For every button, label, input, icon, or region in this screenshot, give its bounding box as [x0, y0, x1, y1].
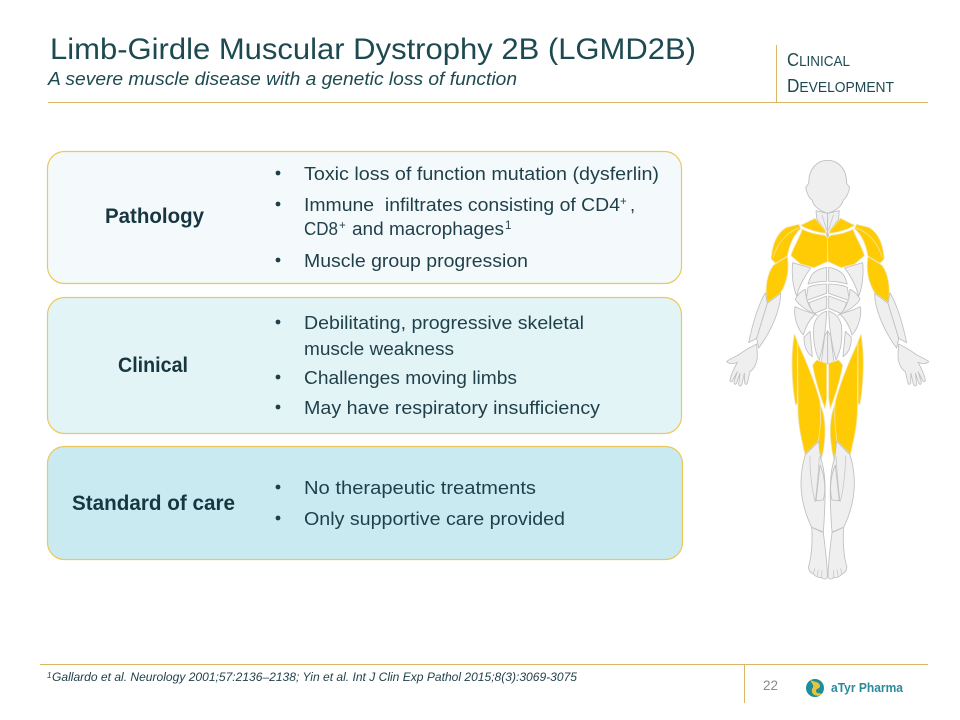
logo: aTyr Pharma	[806, 679, 904, 697]
legs and hands	[727, 334, 929, 579]
section label: clinical development: CLINICAL	[787, 50, 850, 70]
bullet list: clinical	[276, 312, 601, 418]
bullet list: pathology: and macrophages	[352, 218, 504, 239]
bullet list: pathology: Immune infiltrates consisting of CD4	[304, 194, 620, 215]
bullet list: clinical: Debilitating, progressive skeletal	[304, 312, 584, 333]
heading: clinical: Clinical	[118, 354, 188, 377]
bullet list: pathology: CD8	[304, 218, 338, 239]
heading: standard of care: Standard of care	[72, 492, 235, 515]
bullet list: pathology: ,	[630, 194, 635, 215]
section label: clinical development: DEVELOPMENT	[787, 76, 894, 96]
bullet list: pathology: +	[339, 220, 346, 232]
section label: clinical development	[787, 50, 894, 96]
bullet list: pathology: Toxic loss of function mutation (dysferlin)	[304, 163, 659, 184]
bullet list: pathology	[276, 163, 659, 271]
bullet list: standard of care	[276, 477, 565, 529]
torso and arms	[749, 160, 907, 364]
bullet list: pathology: Muscle group progression	[304, 250, 528, 271]
panel: pathology	[48, 152, 682, 284]
bullet list: clinical: Challenges moving limbs	[304, 367, 517, 388]
title: Limb-Girdle Muscular Dystrophy 2B (LGMD2B)	[50, 33, 696, 66]
bullet list: standard of care: No therapeutic treatments	[304, 477, 536, 498]
bullet list: clinical: May have respiratory insufficiency	[304, 397, 601, 418]
illustration: human muscle figure	[727, 160, 929, 579]
footnote: Gallardo et al. Neurology 2001;57:2136–2138; Yin et al. Int J Clin Exp Pathol 2015;8(3):3069-3075	[52, 672, 578, 684]
bullet list: pathology: 1	[505, 220, 511, 232]
panel: clinical	[48, 298, 682, 434]
page number: 22	[763, 677, 778, 693]
logo: aTyr Pharma: aTyr Pharma	[831, 680, 904, 695]
icon: head	[806, 160, 850, 213]
bullet list: clinical: muscle weakness	[304, 338, 454, 359]
footnote: 1	[47, 671, 51, 680]
bullet list: pathology: +	[620, 196, 627, 208]
panel: standard of care	[48, 446, 682, 560]
subtitle: A severe muscle disease with a genetic loss of function	[47, 69, 517, 89]
bullet list: standard of care: Only supportive care provided	[304, 508, 565, 529]
heading: pathology: Pathology	[105, 205, 204, 228]
